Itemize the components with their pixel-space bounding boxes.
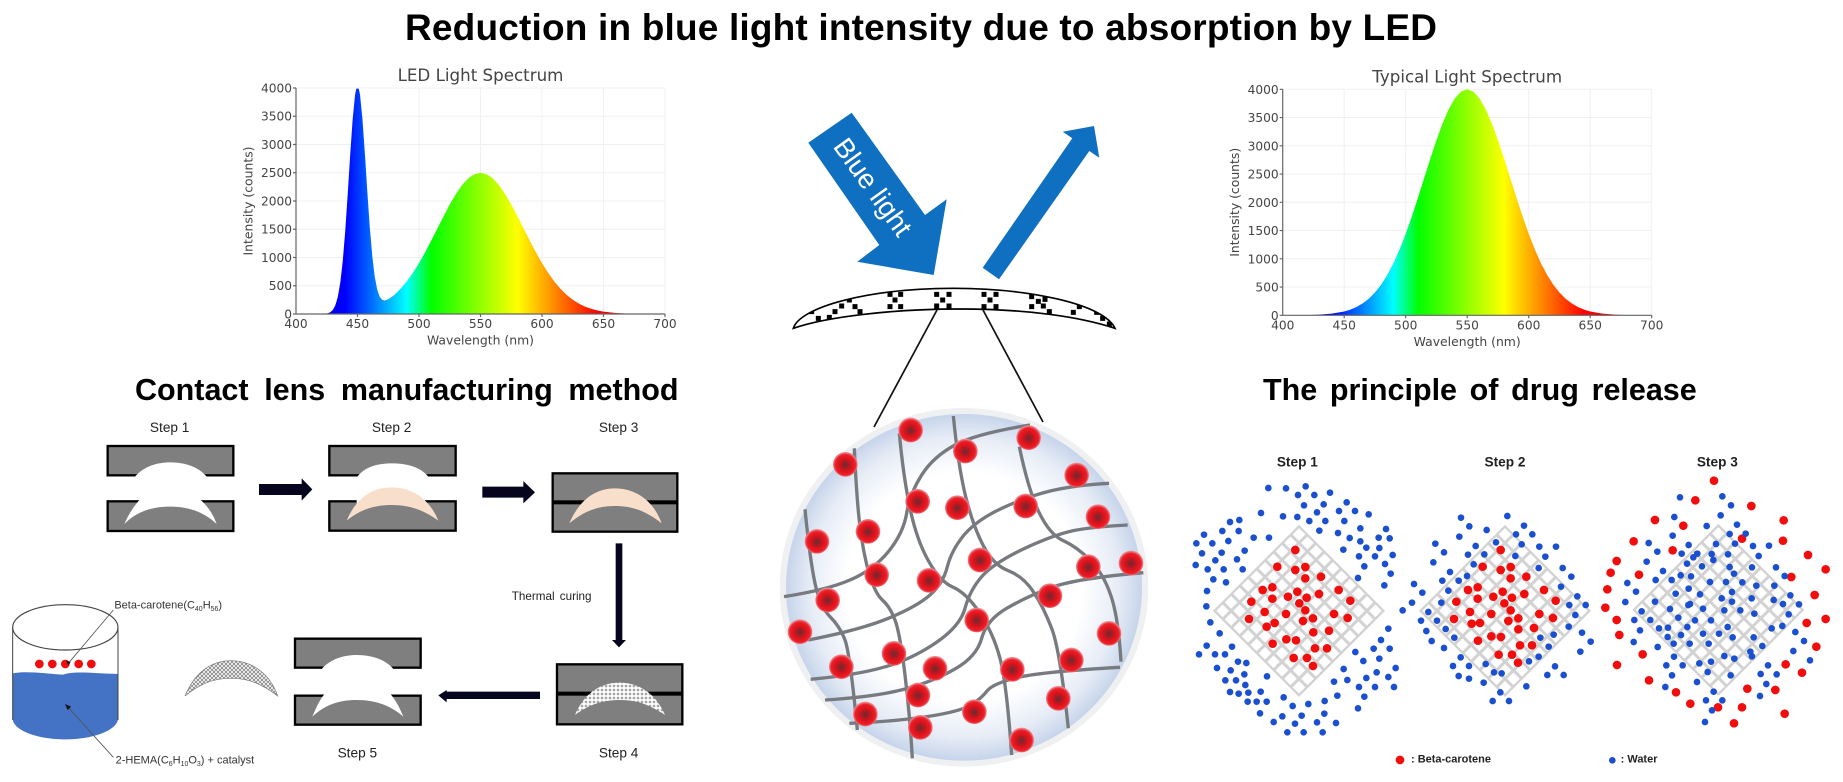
- step 3: Step 3: [599, 420, 638, 435]
- x tick labels: [284, 317, 677, 331]
- heading: principle of drug release: The principle of drug release: [1263, 373, 1697, 407]
- title: Reduction in blue light intensity due to absorption by LED: [405, 7, 1437, 48]
- chart: typical light spectrum: [1227, 66, 1663, 349]
- step 1 diagram: Step 1: [1277, 455, 1318, 470]
- label: beta-carotene: ): [218, 600, 222, 612]
- thermal curing label: Thermal curing: [512, 590, 592, 603]
- label: beta-carotene: 40: [195, 606, 203, 613]
- x tick labels: 500: [407, 317, 431, 331]
- y tick labels: 4000: [1248, 83, 1279, 97]
- step 3: [553, 420, 677, 532]
- label: 2-HEMA: ) + catalyst: [201, 755, 254, 767]
- cured lens: [185, 661, 278, 696]
- label: 2-HEMA: 10: [181, 761, 188, 768]
- y tick labels: 1500: [261, 223, 292, 237]
- x tick labels: 600: [1517, 318, 1540, 332]
- heading: contact lens manufacturing method: Contact lens manufacturing method: [135, 373, 679, 407]
- x tick labels: [1271, 318, 1663, 332]
- water dots: [1196, 486, 1403, 732]
- x tick labels: 700: [1640, 318, 1663, 332]
- y tick labels: 2000: [1248, 196, 1279, 210]
- x axis label: Wavelength (nm): [1414, 334, 1521, 349]
- step 3 diagram: [1605, 455, 1826, 723]
- step 2 diagram: Step 2: [1485, 455, 1526, 470]
- chart title: Typical Light Spectrum: [1371, 66, 1562, 86]
- step 5: Step 5: [338, 746, 377, 761]
- x tick labels: 400: [1271, 318, 1294, 332]
- x tick labels: 400: [284, 317, 308, 331]
- water dots: [1625, 496, 1810, 722]
- chart gridlines: [1283, 89, 1652, 315]
- chart: LED light spectrum: [240, 65, 677, 348]
- y tick labels: 4000: [261, 82, 292, 96]
- y tick labels: 500: [269, 279, 292, 293]
- step 2: Step 2: [372, 420, 411, 435]
- y tick labels: [1248, 83, 1279, 323]
- label: 2-HEMA: H: [173, 755, 181, 767]
- legend: beta-carotene: : Beta-carotene: [1411, 754, 1491, 766]
- x tick labels: 450: [1333, 318, 1356, 332]
- beta-carotene dots: [35, 660, 96, 668]
- y tick labels: 500: [1255, 280, 1279, 294]
- y tick labels: 0: [284, 308, 292, 322]
- y axis label: Intensity (counts): [1227, 148, 1242, 257]
- beta-carotene dots: [1249, 550, 1350, 666]
- label: 2-HEMA: 3: [197, 761, 201, 768]
- chart axes: [1280, 89, 1652, 318]
- step 1: Step 1: [150, 420, 189, 435]
- arrow: step 4 to 5: [438, 690, 540, 702]
- hydrogel grid: [1420, 526, 1590, 696]
- y tick labels: 2000: [261, 194, 292, 208]
- x tick labels: 600: [530, 317, 554, 331]
- label: 2-HEMA: O: [188, 755, 197, 767]
- lens checker motifs: [812, 294, 1109, 324]
- hydrogel grid: [1633, 525, 1803, 695]
- typical spectrum curve: [1283, 89, 1652, 315]
- label: 2-HEMA: 2-HEMA(C: [116, 755, 169, 767]
- y tick labels: 3000: [261, 138, 292, 152]
- y tick labels: 3000: [1248, 139, 1279, 153]
- step 3 diagram: Step 3: [1697, 455, 1738, 470]
- contact lens cross-section: [793, 288, 1115, 328]
- step 5: [295, 639, 421, 761]
- chart gridlines: [296, 88, 665, 314]
- x tick labels: 450: [346, 317, 369, 331]
- step 1: [108, 420, 233, 531]
- x tick labels: 550: [1456, 318, 1479, 332]
- x tick labels: 650: [1579, 318, 1602, 332]
- step 4: Step 4: [599, 746, 639, 761]
- step 2: [329, 420, 456, 531]
- zoom lines from lens to circle: [874, 310, 1043, 427]
- polymer fibres: [784, 416, 1143, 758]
- x tick labels: 550: [469, 317, 492, 331]
- y tick labels: 3500: [261, 110, 292, 124]
- label: beta-carotene: Beta-carotene(C: [114, 600, 195, 612]
- panel: contact lens manufacturing method: [13, 420, 682, 768]
- y tick labels: 2500: [1248, 167, 1279, 181]
- chart axes: [293, 88, 665, 317]
- arrow: step 2 to 3: [482, 481, 535, 503]
- arrow label: Blue light: [827, 132, 919, 242]
- x axis label: Wavelength (nm): [427, 332, 534, 348]
- step 2 diagram: [1412, 455, 1591, 701]
- magnified polymer network circle: [780, 408, 1148, 767]
- arrow: step 3 to 4: [612, 543, 626, 647]
- x tick labels: 500: [1394, 318, 1417, 332]
- hydrogel grid: [1214, 526, 1384, 696]
- y tick labels: 1000: [261, 251, 292, 265]
- beta-carotene dots: [1605, 481, 1826, 723]
- arrow: step 1 to 2: [259, 478, 312, 501]
- beta-carotene dots: [1454, 550, 1556, 663]
- y tick labels: 0: [1271, 309, 1279, 323]
- panel: principle of drug release: [1196, 455, 1826, 766]
- beta-carotene spheres: [788, 418, 1143, 752]
- leader arrowheads: [65, 661, 71, 710]
- y axis label: Intensity (counts): [240, 147, 256, 255]
- y tick labels: [261, 82, 292, 322]
- arrow: incoming blue light: [808, 113, 947, 275]
- label: beta-carotene: 56: [211, 606, 219, 613]
- leader lines: [67, 610, 113, 757]
- step 1 diagram: [1196, 455, 1403, 732]
- step 4: [557, 664, 682, 761]
- label: 2-HEMA: 6: [169, 761, 173, 768]
- chart title: LED Light Spectrum: [398, 65, 563, 85]
- y tick labels: 3500: [1248, 111, 1279, 125]
- water dots: [1412, 516, 1591, 701]
- x tick labels: 650: [592, 317, 615, 331]
- label: beta-carotene: H: [203, 600, 211, 612]
- y tick labels: 2500: [261, 166, 292, 180]
- x tick labels: 700: [653, 317, 677, 331]
- y tick labels: 1500: [1248, 224, 1279, 238]
- lens outline: [793, 288, 1115, 328]
- center diagram: blue light on lens: [780, 113, 1148, 767]
- y tick labels: 1000: [1248, 252, 1279, 266]
- arrow: reflected light: [983, 126, 1099, 279]
- legend: water: : Water: [1621, 754, 1658, 766]
- LED spectrum curve: [314, 89, 665, 314]
- beaker with monomer solution: [13, 605, 118, 757]
